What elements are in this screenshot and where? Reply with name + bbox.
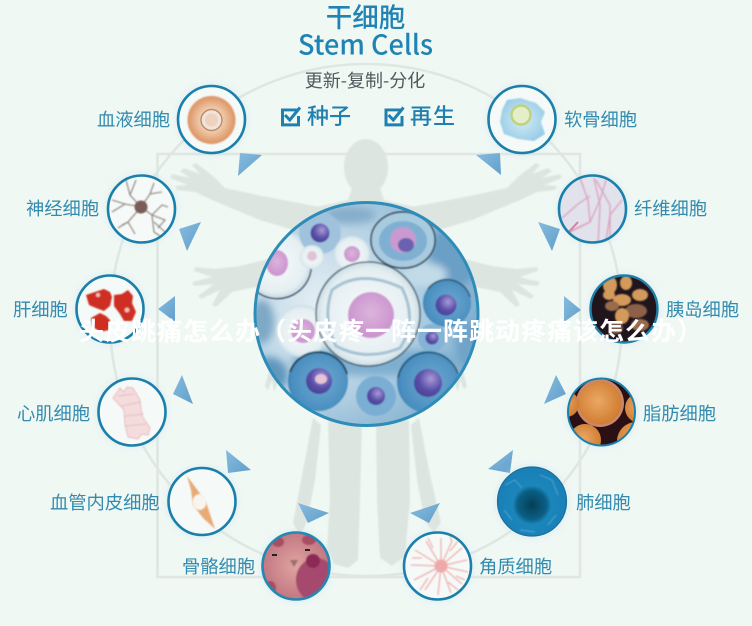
title xyxy=(298,0,433,62)
cell: centre large xyxy=(316,262,420,366)
label: 血管内皮细胞 xyxy=(50,489,160,515)
label: 肝细胞 xyxy=(13,296,68,322)
label: 纤维细胞 xyxy=(634,195,707,221)
human silhouette xyxy=(170,139,562,568)
cell: top white xyxy=(334,236,370,272)
label: 角质细胞 xyxy=(479,553,552,579)
label: 胰岛细胞 xyxy=(666,296,739,322)
cell: cardiac muscle xyxy=(17,376,168,448)
label: 心肌细胞 xyxy=(17,400,90,426)
cell: tiny xyxy=(300,245,324,269)
title: Stem Cells xyxy=(298,22,433,62)
cell: liver xyxy=(13,273,146,345)
label: 神经细胞 xyxy=(26,195,99,221)
cell: right blue xyxy=(423,279,471,327)
arrows xyxy=(158,153,581,523)
cell: fibroblast xyxy=(556,173,707,245)
cell: fat xyxy=(566,376,716,448)
cell: small right xyxy=(418,324,446,352)
cell: bone xyxy=(182,530,336,602)
subtitle: 更新-复制-分化 xyxy=(305,67,425,93)
cell: keratinocyte xyxy=(402,530,552,602)
cell: cartilage xyxy=(486,84,637,156)
cell: left mid xyxy=(276,305,328,357)
decorative vitruvian circle xyxy=(110,64,622,576)
cell: neuron xyxy=(26,173,178,245)
cell: top blue xyxy=(299,212,341,254)
cell: lung xyxy=(495,464,631,538)
cell: pancreatic islet xyxy=(588,273,739,345)
cell: endothelial xyxy=(50,466,238,538)
label: 软骨细胞 xyxy=(564,106,637,132)
overlay caption: 头皮跳痛怎么办（头皮疼一阵一阵跳动疼痛该怎么办） xyxy=(79,312,703,348)
central stem cell image xyxy=(254,201,480,427)
cell: lower right xyxy=(397,351,459,413)
cell: lower left xyxy=(288,351,348,411)
tag: seed: 种子 xyxy=(307,99,351,131)
tag: regeneration: 再生 xyxy=(410,99,455,131)
cell: top right xyxy=(371,212,435,268)
tag: regeneration xyxy=(384,99,455,131)
label: 血液细胞 xyxy=(97,106,170,132)
label: 脂肪细胞 xyxy=(643,400,716,426)
label: 骨骼细胞 xyxy=(182,553,255,579)
label: 肺细胞 xyxy=(576,489,631,515)
cell: blood xyxy=(97,84,248,156)
cell: upper left xyxy=(258,232,313,300)
decorative vitruvian square xyxy=(158,154,580,577)
tag: seed xyxy=(281,99,351,131)
cell: lower mid xyxy=(356,376,396,416)
